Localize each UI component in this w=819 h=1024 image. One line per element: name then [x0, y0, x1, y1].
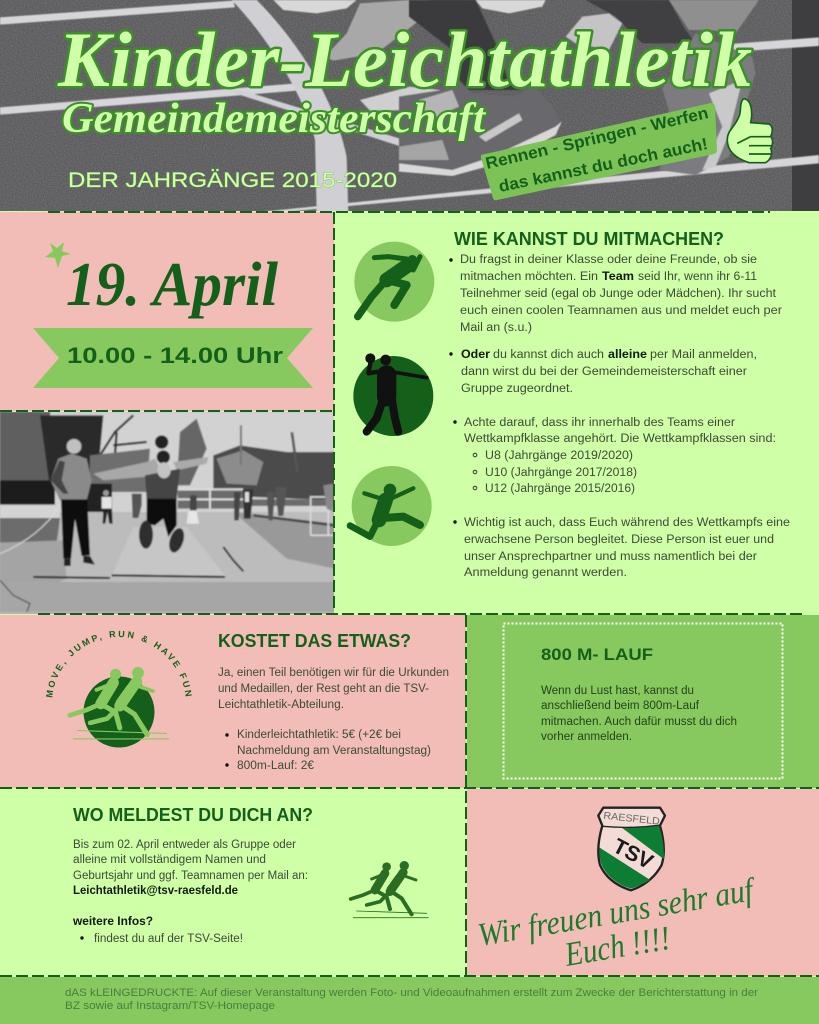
panel: footer note: BZ sowie auf Instagram/TSV-Homepage — [65, 1000, 275, 1012]
panel: header photo — [0, 0, 819, 212]
text block: alone: Oder — [461, 349, 491, 361]
text block: adult: Anmeldung genannt werden. — [464, 567, 627, 579]
ribbon: time — [33, 328, 313, 388]
text block: alone — [449, 349, 757, 395]
price list — [225, 729, 431, 772]
heading: WO MELDEST DU DICH AN? — [73, 805, 313, 825]
text block: Bis zum 02. April entweder als Gruppe oder — [73, 839, 296, 851]
sticker — [481, 103, 717, 200]
ribbon: time: 10.00 - 14.00 Uhr — [67, 343, 284, 368]
logo: TSV Raesfeld — [598, 808, 665, 890]
text block: alone: du kannst dich auch — [493, 349, 604, 361]
heading: KOSTET DAS ETWAS? — [218, 631, 411, 651]
title: Kinder-Leichtathletik — [57, 16, 752, 103]
text block: alone: per Mail anmelden, — [650, 349, 757, 361]
age range: DER JAHRGÄNGE 2015-2020 — [68, 169, 397, 192]
text block: team — [449, 254, 782, 334]
text block: adult: erwachsene Person begleitet. Diese Person ist euer und — [464, 534, 774, 546]
text block — [541, 685, 737, 743]
logo: move jump run — [46, 630, 192, 748]
panel: long jump photo — [0, 412, 335, 614]
text block: alone: Gruppe zugeordnet. — [461, 383, 573, 395]
text block: vorher anmelden. — [541, 731, 632, 743]
text block: classes: U12 (Jahrgänge 2015/2016) — [485, 483, 635, 495]
text block — [218, 667, 449, 711]
text block: alone: alleine — [608, 349, 647, 361]
text block: team: euch einen coolen Teamnamen aus und meldet euch per — [460, 305, 782, 317]
text block: team: mitmachen möchten. Ein — [460, 271, 598, 283]
panel: club greeting — [467, 789, 819, 976]
sticker: Rennen - Springen - Werfen — [484, 104, 710, 173]
text block: mitmachen. Auch dafür musst du dich — [541, 716, 737, 728]
script greeting: Euch !!!! — [561, 920, 673, 974]
icon: jumper — [350, 466, 432, 546]
text block: team: Mail an (s.u.) — [460, 322, 532, 334]
text block: Ja, einen Teil benötigen wir für die Urkunden — [218, 667, 449, 679]
text block: Leichtathletik-Abteilung. — [218, 699, 344, 711]
panel: cost — [0, 615, 466, 788]
text block: classes: Wettkampfklasse angehört. Die Wettkampfklassen sind: — [464, 433, 776, 445]
icon: star — [45, 242, 71, 268]
heading: 800 M- LAUF — [541, 645, 653, 664]
shoes and legs — [399, 0, 759, 176]
price list: 800m-Lauf: 2€ — [237, 760, 315, 772]
panel: date — [0, 212, 334, 411]
logo: move jump run: MOVE, JUMP, RUN & HAVE FUN — [46, 630, 192, 698]
text block: anschließend beim 800m-Lauf — [541, 700, 700, 712]
logo: TSV Raesfeld: TSV — [609, 834, 658, 874]
text block: Leichtathletik@tsv-raesfeld.de — [73, 885, 238, 897]
icon: thumbs up — [727, 99, 773, 163]
text block: und Medaillen, der Rest geht an die TSV- — [218, 683, 429, 695]
text block: weitere Infos? — [72, 916, 153, 928]
logo: TSV Raesfeld: RAESFELD — [603, 811, 660, 828]
heading: WIE KANNST DU MITMACHEN? — [454, 229, 724, 249]
text block: team: Teilnehmer seid (egal ob Junge oder Mädchen). Ihr sucht — [460, 288, 777, 300]
text block: Geburtsjahr und ggf. Teamnamen per Mail an: — [73, 870, 308, 882]
text block: findest du auf der TSV-Seite! — [94, 933, 243, 945]
text block: team: Team — [602, 271, 634, 283]
panel: how to participate — [335, 212, 819, 615]
panel: footer note: dAS kLEINGEDRUCKTE: Auf dieser Veranstaltung werden Foto- und Videoaufnahmen erstellt zum Zwecke der Berichterstattung in der — [65, 987, 758, 999]
icon: shot put — [353, 353, 433, 436]
subtitle: Gemeindemeisterschaft — [62, 96, 486, 142]
text block: team: seid Ihr, wenn ihr 6-11 — [638, 271, 757, 283]
price list: Nachmeldung am Veranstaltungstag) — [237, 745, 431, 757]
date heading: 19. April — [66, 251, 279, 319]
text block: adult — [453, 517, 790, 579]
text block: classes — [453, 417, 776, 495]
text block: classes: U10 (Jahrgänge 2017/2018) — [485, 467, 637, 479]
panel: registration — [0, 789, 466, 976]
left track lines — [0, 0, 819, 212]
text block: adult: unser Ansprechpartner und muss namentlich bei der — [464, 551, 757, 563]
text block: alleine mit vollständigem Namen und — [73, 854, 266, 866]
icon: two runners — [351, 861, 428, 918]
script greeting: Wir freuen uns sehr auf — [475, 872, 759, 954]
panel: 800 m run — [467, 615, 819, 788]
text block: classes: U8 (Jahrgänge 2019/2020) — [485, 450, 633, 462]
icon: runner — [354, 242, 434, 322]
text block: Wenn du Lust hast, kannst du — [541, 685, 694, 697]
text block: classes: Achte darauf, dass ihr innerhalb des Teams einer — [464, 417, 735, 429]
text block: team: Du fragst in deiner Klasse oder deine Freunde, ob sie — [460, 254, 757, 266]
text block: adult: Wichtig ist auch, dass Euch während des Wettkampfs eine — [464, 517, 790, 529]
panel: footer note — [0, 977, 819, 1024]
text block: alone: dann wirst du bei der Gemeindemeisterschaft einer — [461, 366, 747, 378]
price list: Kinderleichtathletik: 5€ (+2€ bei — [237, 729, 401, 741]
text block — [72, 839, 308, 945]
sticker: das kannst du doch auch! — [497, 135, 709, 196]
